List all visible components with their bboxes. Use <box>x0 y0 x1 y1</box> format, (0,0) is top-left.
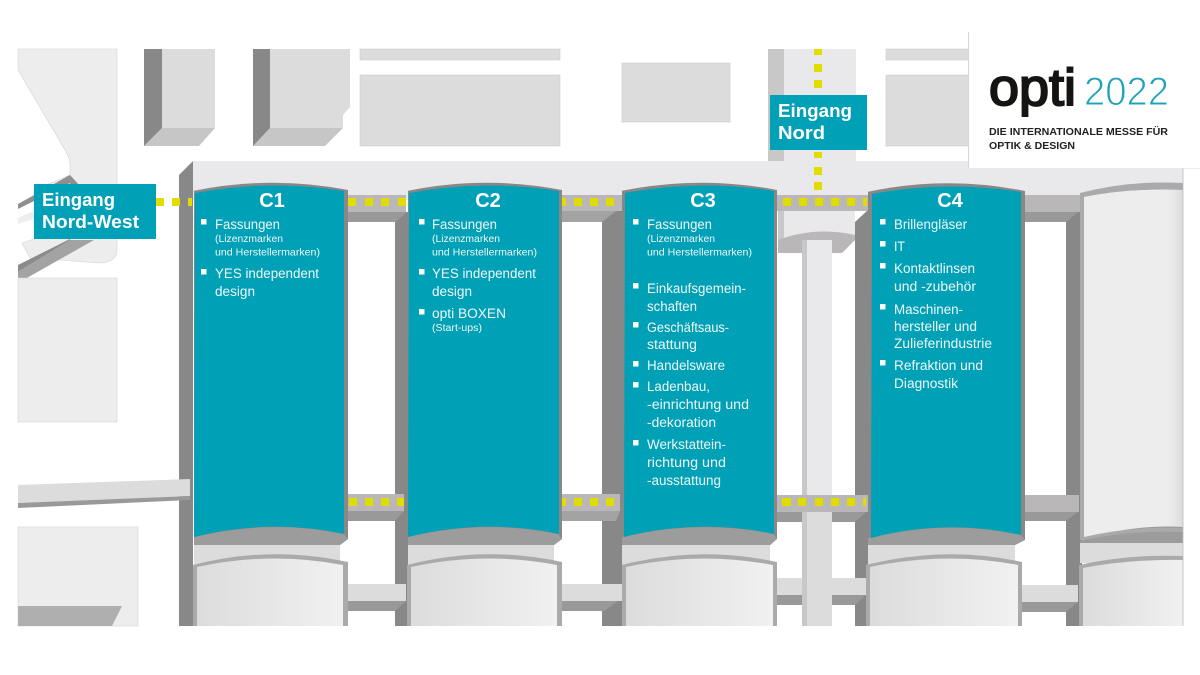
neighbouring buildings <box>144 49 976 146</box>
list: C3 exhibitors: Ladenbau, <box>647 379 710 394</box>
exhibition centre base: top band, columns and corridors <box>18 161 1183 626</box>
list: C2 exhibitors: (Lizenzmarken <box>432 234 500 245</box>
list: C2 exhibitors: (Start-ups) <box>432 323 482 334</box>
yellow route: north-west entrance <box>156 198 192 206</box>
list: C3 exhibitors: -dekoration <box>647 415 716 430</box>
callout: Eingang Nord-West: Eingang <box>42 190 115 210</box>
panel: hall C4 <box>866 183 1025 626</box>
list: C1 exhibitors <box>201 217 320 299</box>
callout: Eingang Nord <box>770 95 867 150</box>
list: C1 exhibitors: (Lizenzmarken <box>215 234 283 245</box>
list: C2 exhibitors <box>419 217 537 334</box>
list: C3 exhibitors: stattung <box>647 337 697 352</box>
list: C1 exhibitors: YES independent <box>215 266 319 281</box>
tagline: OPTIK & DESIGN <box>989 140 1075 152</box>
list: C3 exhibitors: Fassungen <box>647 217 712 232</box>
callout: Eingang Nord: Eingang <box>778 101 852 121</box>
list: C2 exhibitors: Fassungen <box>432 217 497 232</box>
panel: hall C1 <box>193 183 348 626</box>
list: C3 exhibitors: Handelsware <box>647 358 725 373</box>
list: C4 exhibitors: Zulieferindustrie <box>894 336 992 351</box>
panel: hall C3 <box>621 183 777 626</box>
list: C2 exhibitors: opti BOXEN <box>432 306 506 321</box>
list: C1 exhibitors: und Herstellermarken) <box>215 248 320 258</box>
heading: C2: C2 <box>475 190 501 212</box>
list: C4 exhibitors: Maschinen- <box>894 302 963 317</box>
list: C4 exhibitors: Refraktion und <box>894 358 983 373</box>
logo: opti wordmark: opti <box>989 59 1076 117</box>
heading: C3: C3 <box>690 190 716 212</box>
surrounding area: north-west plot and roads <box>18 49 138 626</box>
list: C3 exhibitors: Geschäftsaus- <box>647 320 729 335</box>
yellow route: lower corridor <box>349 498 866 506</box>
list: C3 exhibitors <box>633 217 752 488</box>
panel: hall C2 <box>407 183 562 626</box>
list: C2 exhibitors: und Herstellermarken) <box>432 248 537 258</box>
yellow route: north entrance <box>814 49 822 190</box>
list: C3 exhibitors: Werkstattein- <box>647 437 726 452</box>
list: C3 exhibitors: richtung und <box>647 455 726 470</box>
list: C3 exhibitors: -ausstattung <box>647 473 721 488</box>
list: C3 exhibitors: schaften <box>647 299 697 314</box>
tagline <box>989 125 1168 152</box>
list: C2 exhibitors: design <box>432 284 472 299</box>
list: C4 exhibitors: IT <box>894 239 905 254</box>
list: C3 exhibitors: Einkaufsgemein- <box>647 281 746 296</box>
tagline: DIE INTERNATIONALE MESSE FÜR <box>989 125 1168 138</box>
list: C2 exhibitors: YES independent <box>432 266 536 281</box>
heading: C4: C4 <box>937 190 964 212</box>
list: C4 exhibitors: hersteller und <box>894 319 977 334</box>
callout: Eingang Nord: Nord <box>778 123 825 143</box>
heading: C1: C1 <box>259 190 285 212</box>
list: C4 exhibitors: Brillengläser <box>894 217 968 232</box>
list: C3 exhibitors: und Herstellermarken) <box>647 248 752 258</box>
north street <box>768 49 856 162</box>
list: C1 exhibitors: design <box>215 284 255 299</box>
panel: adjacent hall without label <box>1079 168 1200 626</box>
list: C4 exhibitors: und -zubehör <box>894 279 977 294</box>
central walkway <box>776 240 868 626</box>
logo: year 2022: 2022 <box>1084 70 1169 114</box>
list: C4 exhibitors: Diagnostik <box>894 376 958 391</box>
panel: logo box <box>968 32 1200 168</box>
list: C4 exhibitors: Kontaktlinsen <box>894 261 975 276</box>
callout: Eingang Nord-West: Nord-West <box>42 212 139 232</box>
list: C3 exhibitors: -einrichtung und <box>647 397 749 412</box>
list: C4 exhibitors <box>880 217 992 391</box>
callout: Eingang Nord-West <box>34 184 156 239</box>
yellow route: upper corridor <box>348 198 867 206</box>
list: C3 exhibitors: (Lizenzmarken <box>647 234 715 245</box>
list: C1 exhibitors: Fassungen <box>215 217 280 232</box>
